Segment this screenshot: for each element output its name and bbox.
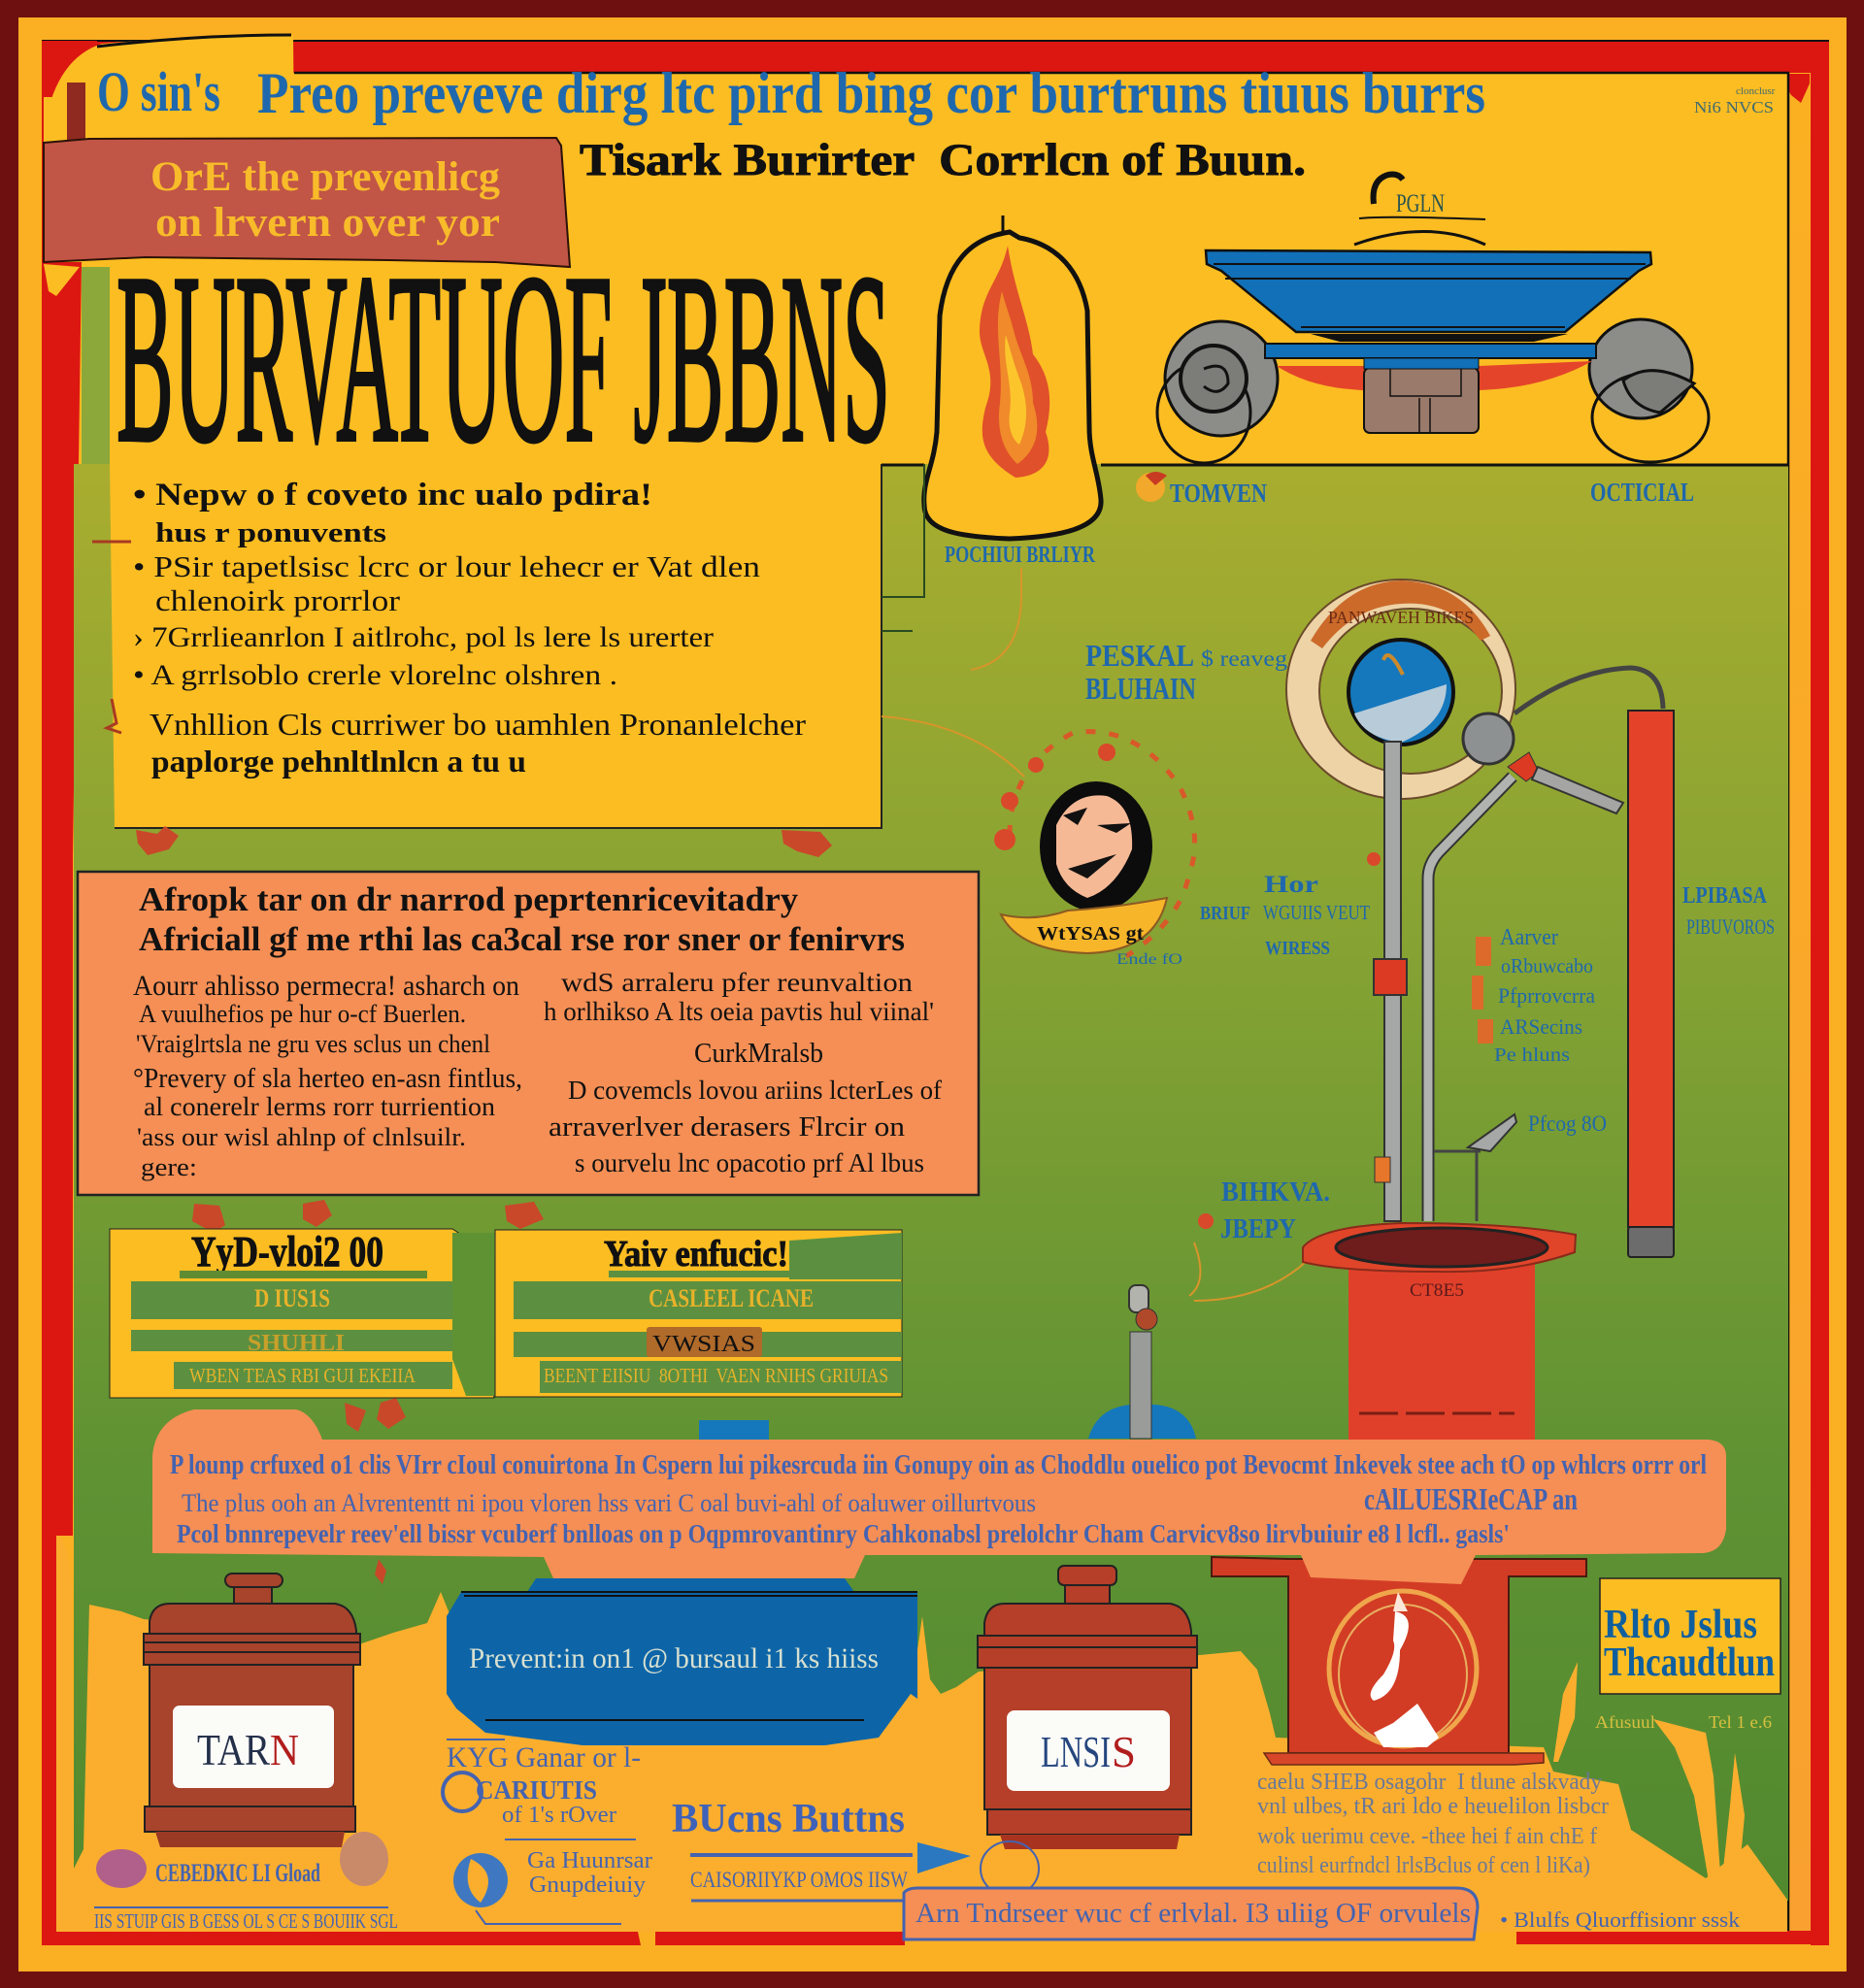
red cylinder <box>1628 711 1674 1227</box>
lower left blue notes: of 1's rOver <box>502 1803 616 1828</box>
arrow note: CAISORIIYKP OMOS IISW <box>690 1868 908 1892</box>
card: stat two: VWSIAS <box>652 1332 755 1357</box>
blue box <box>447 1578 917 1745</box>
label: cylinder: PIBUVOROS <box>1686 914 1775 939</box>
label on burner: PGLN <box>1396 189 1445 217</box>
left column: 'Vraiglrtsla ne gru ves sclus un chenl <box>136 1030 490 1058</box>
callout lines: Pcol bnnrepevelr reev'ell bissr vcuberf bnlloas on p Oqpmrovantinry Cahkonabsl prelolchr Cham Carvicv8so lirvbuiuir e8 l lcfl.. gasls' <box>177 1519 1510 1548</box>
panel: bottom outlined box <box>904 1888 1478 1939</box>
left column: al conerelr lerms rorr turriention <box>144 1092 496 1121</box>
labels: right side list: Pfprrovcrra <box>1498 983 1595 1008</box>
gas apparatus <box>1286 580 1674 1446</box>
lower orange ground <box>56 1536 1787 1932</box>
portrait medallion: Ende fO <box>1116 951 1182 968</box>
panel: bullet list <box>92 464 924 828</box>
connector lines <box>882 464 1306 1301</box>
panel: bullet list: • PSir tapetlsisc lcrc or lour lehecr er Vat dlen <box>133 549 761 583</box>
panel: bottom outlined box: Arn Tndrseer wuc cf erlvlal. I3 uliig OF orvulels <box>915 1898 1471 1929</box>
bottom right note: • Blulfs Qluorffisionr sssk <box>1500 1907 1740 1932</box>
labels: right side list: oRbuwcabo <box>1501 954 1593 977</box>
label: lever: Pfcog 8O <box>1528 1111 1607 1136</box>
canister: Lnsis <box>978 1566 1197 1849</box>
labels: right side list <box>1472 925 1595 1066</box>
orange flame tongues <box>1553 1662 1745 1881</box>
card: stat two <box>495 1230 902 1397</box>
label: peskal: $ reaveg <box>1201 646 1288 671</box>
labels: right side list: ARSecins <box>1500 1014 1582 1039</box>
title: O sin's <box>97 60 220 123</box>
labels: near medallion: WGUIIS VEUT <box>1263 901 1370 924</box>
label: peskal <box>1085 638 1288 706</box>
panel: bullet list: › 7Grrlieanrlon I aitlrohc, pol ls lere ls urerter <box>133 621 714 653</box>
portrait medallion <box>994 732 1195 968</box>
small top right note: clonclusr <box>1736 85 1776 97</box>
green background area <box>74 464 1788 1901</box>
tab top left <box>44 35 294 296</box>
callout lines <box>170 1449 1707 1548</box>
right column: h orlhikso A lts oeia pavtis hul viinal' <box>544 997 934 1026</box>
ring gauge: PANWAVEH BIKES <box>1328 608 1474 627</box>
card: stat two: Yaiv enfucic! <box>604 1234 788 1275</box>
blue mound behind callout <box>699 1420 769 1440</box>
canister: Tarn: N <box>270 1725 299 1774</box>
globe note <box>453 1839 652 1924</box>
canister: Lnsis: S <box>1112 1727 1136 1776</box>
labels: right side list: Aarver <box>1500 925 1558 950</box>
card: stat one <box>110 1228 494 1398</box>
panel: bullet list: • Nepw o f coveto inc ualo pdira! <box>133 478 652 513</box>
callout lines: cAlLUESRIeCAP an <box>1364 1481 1578 1516</box>
left column: °Prevery of sla herteo en-asn fintlus, <box>133 1064 522 1094</box>
labels around the top illustrations: OCTICIAL <box>1590 478 1694 507</box>
yellow info box: Thcaudtlun <box>1604 1640 1775 1685</box>
paragraph under fire pot <box>1257 1770 1609 1878</box>
right column: arraverlver derasers Flrcir on <box>549 1112 905 1143</box>
paragraph under fire pot: caelu SHEB osagohr I tlune alskvady <box>1257 1770 1602 1795</box>
banner: red: OrE the prevenlicg <box>150 154 501 200</box>
label: pot: BIHKVA. <box>1221 1176 1330 1208</box>
card: stat one: YyD-vloi2 00 <box>191 1228 383 1276</box>
subtitle: Tisark Burirter Corrlcn of Buun. <box>580 135 1306 185</box>
small top right note <box>1694 85 1776 116</box>
arrow note <box>690 1841 1039 1901</box>
gauge and nozzle <box>1514 668 1663 713</box>
small valve <box>1088 1285 1196 1439</box>
left column: A vuulhefios pe hur o-cf Buerlen. <box>139 1000 466 1028</box>
heading: Bucns Buttns: BUcns Buttns <box>672 1797 905 1841</box>
portrait medallion: WtYSAS gt <box>1037 923 1144 944</box>
right column: D covemcls lovou ariins lcterLes of <box>568 1076 942 1105</box>
panel: bullet list: chlenoirk prorrlor <box>155 583 401 617</box>
red left frame <box>42 41 97 1932</box>
card: stat one: SHUHLI <box>248 1331 345 1356</box>
blue box: Prevent:in on1 @ bursaul i1 ks hiiss <box>469 1642 879 1674</box>
small yellow notes on green: Tel 1 e.6 <box>1709 1712 1772 1732</box>
right column <box>544 968 942 1177</box>
label: pot: JBEPY <box>1220 1213 1296 1244</box>
canister: Lnsis: LNSI <box>1041 1727 1111 1776</box>
panel: bullet list: hus r ponuvents <box>155 517 386 548</box>
bottom left note with stamp: IIS STUIP GIS B GESS OL S CE S BOUIIK SGL <box>94 1909 398 1933</box>
fire pot <box>1212 1557 1586 1765</box>
panel: orange article <box>78 872 979 1195</box>
card: stat one: D IUS1S <box>254 1284 330 1312</box>
paragraph under fire pot: wok uerimu ceve. -thee hei f ain chE f <box>1257 1824 1597 1849</box>
small yellow notes on green: Afusuul <box>1595 1712 1655 1732</box>
pipes <box>1384 742 1401 1221</box>
globe note: Ga Huunrsar <box>527 1848 652 1873</box>
icon: flame in bell jar <box>924 215 1101 539</box>
left column: Aourr ahlisso permecra! asharch on <box>133 970 519 1002</box>
left column <box>133 970 522 1181</box>
card: stat one: WBEN TEAS RBI GUI EKEIIA <box>189 1364 416 1387</box>
lower left blue notes: CARIUTIS <box>476 1775 597 1805</box>
left column: 'ass our wisl ahlnp of clnlsuilr. <box>137 1123 466 1151</box>
card: stat two: CASLEEL ICANE <box>649 1284 814 1312</box>
callout lines: The plus ooh an Alvrententt ni ipou vloren hss vari C oal buvi-ahl of oaluwer oillurtvous <box>182 1489 1036 1517</box>
bottom left note with stamp: CEBEDKIC LI Gload <box>155 1859 320 1887</box>
canister: Tarn <box>144 1574 360 1847</box>
panel: orange article: Afropk tar on dr narrod peprtenricevitadry <box>139 880 799 918</box>
labels: near medallion: BRIUF <box>1200 903 1250 924</box>
labels: near medallion: WIRESS <box>1265 938 1330 959</box>
green divider line <box>882 464 1788 466</box>
label: cylinder: LPIBASA <box>1682 883 1768 909</box>
right column: wdS arraleru pfer reunvaltion <box>561 968 914 997</box>
labels around the top illustrations: TOMVEN <box>1170 479 1267 508</box>
yellow info box <box>1600 1578 1781 1694</box>
left column: gere: <box>141 1153 197 1181</box>
labels: right side list: Pe hluns <box>1494 1044 1570 1066</box>
labels: near medallion <box>1200 872 1370 959</box>
banner: red: on lrvern over yor <box>155 200 500 246</box>
red bottom frame <box>42 1931 1829 1945</box>
banner: red <box>44 138 570 267</box>
labels around the top illustrations: POCHIUI BRLIYR <box>945 543 1095 568</box>
gas apparatus: CT8E5 <box>1410 1280 1464 1301</box>
decorative splatter <box>136 826 832 1584</box>
small yellow notes on green <box>1595 1712 1772 1732</box>
paragraph under fire pot: culinsl eurfndcl lrlsBclus of cen l liKa) <box>1257 1853 1590 1878</box>
label: pot <box>1198 1176 1330 1244</box>
right column: CurkMralsb <box>694 1039 823 1069</box>
yellow info box: Rlto Jslus <box>1604 1603 1757 1647</box>
canister: Tarn: TAR <box>197 1725 270 1774</box>
lower left blue notes <box>443 1740 641 1828</box>
panel: bullet list: Vnhllion Cls curriwer bo uamhlen Pronanlelcher <box>150 707 806 742</box>
panel: bullet list: paplorge pehnltlnlcn a tu u <box>151 744 526 779</box>
lever <box>1434 1151 1481 1221</box>
illustration: blue burner on wheels <box>1157 175 1709 463</box>
paragraph under fire pot: vnl ulbes, tR ari ldo e heuelilon lisbcr <box>1257 1794 1609 1819</box>
globe note: Gnupdeiuiy <box>529 1872 646 1898</box>
ring gauge <box>1286 580 1515 799</box>
label: cylinder <box>1682 883 1775 939</box>
labels around the top illustrations <box>945 472 1694 568</box>
label: peskal: PESKAL <box>1085 638 1194 673</box>
lower left blue notes: KYG Ganar or l- <box>447 1741 641 1773</box>
title: Preo preveve dirg ltc pird bing cor burtruns tiuus burrs <box>257 61 1485 125</box>
bottom left note with stamp <box>94 1832 398 1933</box>
panel: orange article: Africiall gf me rthi las ca3cal rse ror sner or fenirvrs <box>139 920 905 958</box>
labels: near medallion: Hor <box>1264 872 1318 898</box>
card: stat two: BEENT EIISIU 8OTHI VAEN RNIHS GRIUIAS <box>544 1364 888 1387</box>
panel: bullet list: • A grrlsoblo crerle vlorelnc olshren . <box>133 659 617 691</box>
red pot <box>1348 1262 1535 1446</box>
small top right note: Ni6 NVCS <box>1694 98 1774 116</box>
label: peskal: BLUHAIN <box>1085 671 1196 706</box>
right column: s ourvelu lnc opacotio prf Al lbus <box>575 1148 924 1177</box>
panel: wide callout <box>152 1409 1726 1584</box>
